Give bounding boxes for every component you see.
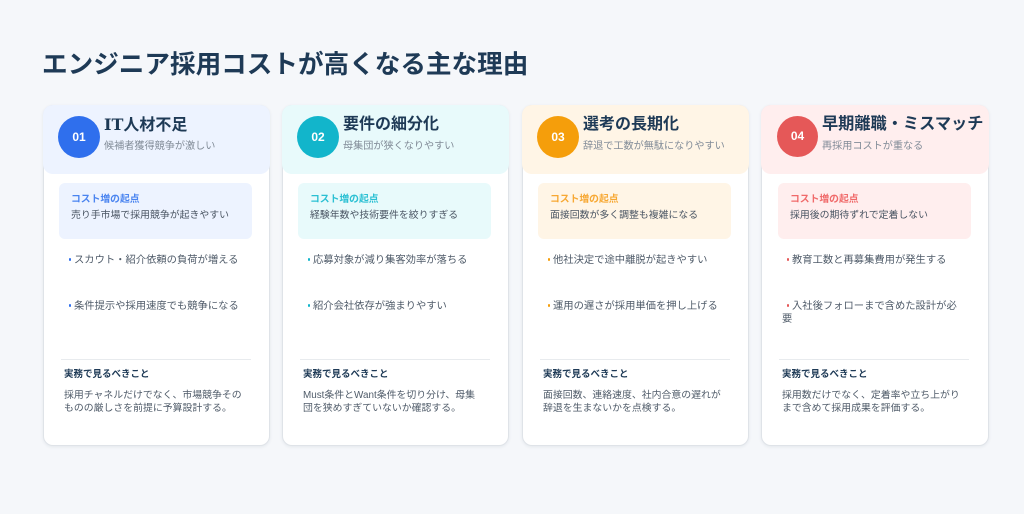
bullet 02-1: 応募対象が減り集客効率が落ちる — [313, 255, 467, 266]
bullet 04-2 — [782, 300, 957, 324]
number badge 04 — [777, 116, 818, 157]
number badge 01 — [58, 116, 100, 158]
callout 01 — [59, 183, 252, 239]
subheading 04: 再採用コストが重なる — [822, 141, 923, 152]
card header 01 — [43, 105, 270, 174]
subheading 01: 候補者獲得競争が激しい — [104, 141, 215, 152]
practice heading 04: 実務で見るべきこと — [782, 369, 868, 380]
callout 04 — [778, 183, 971, 239]
card header 02 — [282, 105, 509, 174]
bullet 01-2: 条件提示や採用速度でも競争になる — [74, 301, 239, 312]
bullet 04-1: 教育工数と再募集費用が発生する — [792, 255, 946, 266]
callout label 01: コスト増の起点 — [71, 194, 140, 205]
callout text 04: 採用後の期待ずれで定着しない — [790, 210, 928, 221]
bullet 02-2: 紹介会社依存が強まりやすい — [313, 301, 447, 312]
callout text 02: 経験年数や技術要件を絞りすぎる — [310, 210, 458, 221]
bullet 03-1: 他社決定で途中離脱が起きやすい — [553, 255, 707, 266]
heading 04: 早期離職・ミスマッチ — [822, 115, 983, 133]
number badge 03 — [537, 116, 579, 158]
subheading 02: 母集団が狭くなりやすい — [343, 141, 454, 152]
practice text 03: 面接回数、連絡速度、社内合意の遅れが辞退を生まないかを点検する。 — [543, 390, 721, 414]
practice heading 03: 実務で見るべきこと — [543, 369, 629, 380]
number badge 04: 04 — [791, 129, 804, 143]
practice text 02: Must条件とWant条件を切り分け、母集団を狭めすぎていないか確認する。 — [303, 390, 475, 414]
bullet 03-2: 運用の遅さが採用単価を押し上げる — [553, 301, 718, 312]
heading 03: 選考の長期化 — [583, 116, 679, 133]
callout text 03: 面接回数が多く調整も複雑になる — [550, 210, 698, 221]
panel: 03 選考の長期化 — [522, 105, 749, 446]
number badge 01: 01 — [72, 130, 86, 144]
callout label 03: コスト増の起点 — [550, 194, 619, 205]
bullet 01-1: スカウト・紹介依頼の負荷が増える — [74, 255, 238, 266]
heading 01: IT人材不足 — [104, 115, 187, 134]
practice text 01: 採用チャネルだけでなく、市場競争そのものの厳しさを前提に予算設計する。 — [64, 390, 242, 414]
callout label 04: コスト増の起点 — [790, 194, 859, 205]
panel: 04 早期離職・ミスマッチ — [761, 105, 989, 446]
panel: 01 IT人材不足 — [43, 105, 270, 446]
number badge 02: 02 — [311, 130, 325, 144]
number badge 03: 03 — [551, 130, 565, 144]
panel: 02 要件の細分化 — [282, 105, 509, 446]
title: エンジニア採用コストが高くなる主な理由 — [42, 51, 528, 79]
heading 02: 要件の細分化 — [343, 116, 439, 133]
bullet 04-2: 要 — [782, 314, 792, 324]
card header 03 — [522, 105, 749, 174]
practice text 04: 採用数だけでなく、定着率や立ち上がりまで含めて採用成果を評価する。 — [782, 390, 960, 414]
callout label 02: コスト増の起点 — [310, 194, 379, 205]
practice heading 01: 実務で見るべきこと — [64, 369, 150, 380]
callout text 01: 売り手市場で採用競争が起きやすい — [71, 210, 229, 221]
subheading 03: 辞退で工数が無駄になりやすい — [583, 141, 725, 152]
callout 02 — [298, 183, 491, 239]
bullet 04-2: 入社後フォローまで含めた設計が必 — [792, 301, 957, 312]
callout 03 — [538, 183, 731, 239]
practice heading 02: 実務で見るべきこと — [303, 369, 389, 380]
number badge 02 — [297, 116, 339, 158]
card header 04 — [761, 105, 989, 174]
